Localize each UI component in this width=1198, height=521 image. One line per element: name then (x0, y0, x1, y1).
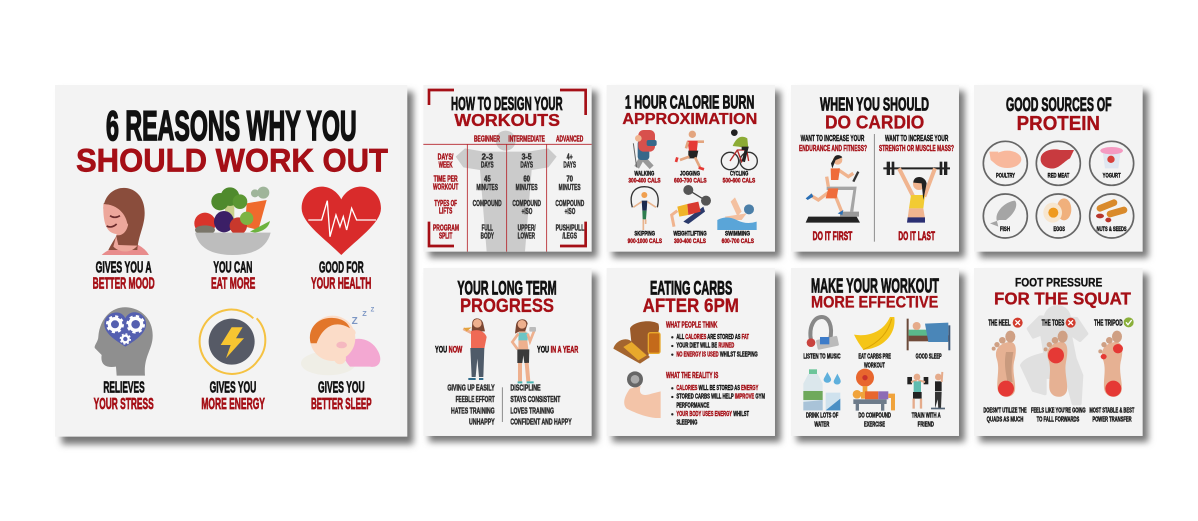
table cells: 70 (566, 175, 573, 184)
icon: head with gears (95, 307, 153, 376)
label: you now: YOU NOW (435, 344, 462, 354)
table row headings: SPLIT (439, 231, 452, 240)
label: walking (628, 171, 661, 184)
icon: swimmer (717, 197, 757, 230)
icon: fish (983, 194, 1027, 238)
title: WHEN YOU SHOULD (820, 94, 929, 115)
table cells: +ISO (565, 207, 575, 216)
table row headings: TYPES OF (434, 199, 457, 208)
icon: nuts and seeds (1090, 194, 1134, 238)
label: cycling: CYCLING (730, 171, 748, 178)
title (643, 278, 739, 317)
table column headings: INTERMEDIATE (508, 134, 545, 143)
title: DO CARDIO (825, 111, 924, 132)
label: the tripod: THE TRIPOD (1094, 318, 1123, 327)
label: train with a friend (912, 413, 941, 428)
icon: yogurt (1090, 141, 1134, 185)
label: weightlifting: WEIGHTLIFTING (673, 231, 707, 238)
list: now traits: FEEBLE EFFORT (456, 394, 495, 404)
icon: compound bench press (853, 369, 895, 411)
title: GOOD SOURCES OF (1006, 95, 1112, 116)
muscle figure watermark (456, 131, 557, 252)
title: 6 REASONS WHY YOU (106, 102, 357, 149)
icon: eggs (1036, 194, 1080, 238)
icon: training friends (907, 372, 945, 409)
table cells: MINUTES (516, 183, 538, 192)
label: relieves stress (94, 380, 154, 413)
caption: heel: QUADS AS MUCH (987, 416, 1023, 423)
label: jogging: 600-700 CALS (674, 177, 707, 184)
panel: 1 hour calorie burn (607, 85, 781, 258)
label: more energy: MORE ENERGY (201, 396, 265, 413)
table row headings (433, 152, 459, 240)
caption: heel: DOESN'T UTILIZE THE (983, 408, 1027, 415)
label: weightlifting: 300-400 CALS (674, 238, 706, 245)
panel: how to design your workouts (423, 85, 597, 258)
icon: poultry: POULTRY (996, 172, 1015, 179)
icon: jogger (676, 131, 704, 169)
icon: cyclist (721, 129, 757, 170)
table row headings: WORKOUT (433, 182, 458, 191)
label: do compound exercise: DO COMPOUND (858, 413, 891, 420)
question: strength (879, 133, 954, 153)
list: future traits: DISCIPLINE (510, 383, 541, 393)
label: cycling (723, 171, 756, 184)
question: endurance: ENDURANCE AND FITNESS? (799, 143, 867, 153)
corner brackets (429, 90, 586, 246)
list: what people think: WHAT PEOPLE THINK (666, 321, 717, 330)
label: more energy: GIVES YOU (210, 380, 256, 397)
table cells: 3-5 (522, 152, 532, 161)
label: do compound exercise: EXERCISE (864, 421, 885, 428)
label: cycling: 500-600 CALS (723, 177, 756, 184)
label: better mood: BETTER MOOD (93, 275, 155, 292)
table column headings: BEGINNER (474, 134, 500, 143)
list: future traits: STAYS CONSISTENT (510, 394, 561, 404)
table cells: FULL (482, 224, 493, 233)
figure: you now (463, 318, 487, 380)
table cells: MINUTES (559, 183, 581, 192)
title: HOW TO DESIGN YOUR (451, 93, 563, 114)
label: swimming: 600-700 CALS (722, 238, 754, 245)
caption: toes (1031, 408, 1086, 423)
label: weightlifting (673, 231, 707, 245)
table cells: LOWER (518, 231, 535, 240)
panel: good sources of protein (974, 85, 1148, 258)
title: MAKE YOUR WORKOUT (811, 276, 939, 298)
icon: sleeping baby: Z (352, 316, 358, 327)
list: what the reality is: PERFORMANCE (676, 402, 710, 409)
label: more energy (201, 380, 265, 413)
title: SHOULD WORK OUT (76, 143, 388, 179)
foot: tripod pressure (1098, 331, 1123, 397)
list: what the reality is: YOUR BODY USES ENERGY WHILST (676, 411, 749, 418)
label: swimming: SWIMMING (725, 231, 750, 238)
caption: tripod (1089, 408, 1135, 423)
label: walking: WALKING (634, 171, 654, 178)
icon: energy bolt (200, 310, 265, 374)
title (457, 278, 557, 317)
label: eat more: EAT MORE (211, 275, 255, 292)
icon: sleeping baby (301, 308, 380, 375)
title (1006, 95, 1112, 135)
table row headings: DAYS/ (438, 152, 454, 161)
table cells: DAYS (481, 160, 494, 169)
panel: when you should do cardio (791, 85, 965, 258)
icon: eggs: EGGS (1053, 226, 1065, 233)
title: WORKOUTS (454, 110, 560, 130)
label: skipping: SKIPPING (634, 231, 655, 238)
icon: headphones (807, 317, 839, 350)
table cells: COMPOUND (512, 199, 541, 208)
icon: walking hiker (633, 130, 657, 167)
list: future traits: CONFIDENT AND HAPPY (510, 417, 572, 427)
table cells: 60 (523, 175, 530, 184)
caption: toes: FEELS LIKE YOU'RE GOING (1031, 408, 1086, 415)
label: the heel: THE HEEL (988, 318, 1011, 327)
title: FOR THE SQUAT (994, 288, 1131, 308)
label: eat carbs pre workout (858, 354, 891, 369)
table row headings: LIFTS (439, 206, 453, 215)
list: future traits: LOVES TRAINING (510, 405, 554, 415)
label: better mood (93, 260, 155, 292)
foot: toes pressure (1044, 331, 1068, 397)
icon: treadmill runner (806, 155, 860, 223)
table cells: COMPOUND (555, 199, 584, 208)
label: drink lots of water: WATER (814, 421, 829, 428)
icon: red meat (1036, 141, 1080, 185)
label: do it first: DO IT FIRST (813, 229, 853, 243)
label: eat more: YOU CAN (213, 260, 252, 277)
icon: weightlifter (883, 162, 950, 223)
title: EATING CARBS (650, 278, 732, 299)
label: eat carbs pre workout: EAT CARBS PRE (858, 354, 891, 361)
list: what the reality is: STORED CARBS WILL HELP IMPROVE GYM (676, 394, 765, 401)
list: now traits: HATES TRAINING (451, 405, 495, 415)
table cells: 2-3 (482, 152, 494, 161)
label: your health: YOUR HEALTH (311, 275, 371, 292)
figure: you in a year (512, 319, 536, 383)
label: do compound exercise (858, 413, 891, 428)
list: what people think (666, 321, 758, 358)
title: APPROXIMATION (622, 111, 757, 128)
label: drink lots of water: DRINK LOTS OF (806, 413, 839, 420)
label: your health: GOOD FOR (319, 260, 364, 277)
table cells: DAYS (563, 160, 576, 169)
table cells: 45 (484, 175, 491, 184)
label: better sleep: BETTER SLEEP (311, 396, 372, 413)
list: what the reality is: SLEEPING (676, 420, 697, 427)
panel: make your workout more effective (791, 268, 965, 442)
table cells: UPPER/ (518, 224, 536, 233)
question: endurance (799, 133, 867, 153)
table grid (423, 144, 592, 252)
label: jogging: JOGGING (680, 171, 700, 178)
table row headings: TIME PER (434, 175, 458, 184)
panel: eating carbs after 6pm (607, 268, 781, 442)
table row headings: PROGRAM (433, 224, 459, 233)
icon: vegetable bowl (194, 187, 271, 255)
title: 1 HOUR CALORIE BURN (625, 91, 754, 112)
label: the toes: THE TOES (1042, 318, 1065, 327)
icon: bed (907, 319, 950, 350)
title (76, 102, 388, 179)
list: what people think: NO ENERGY IS USED WHILST SLEEPING (676, 351, 758, 358)
label: better sleep: GIVES YOU (318, 380, 365, 397)
icon: sleeping baby: Z (362, 309, 367, 318)
title (451, 93, 563, 130)
table cells: +ISO (522, 207, 532, 216)
table column headings (474, 134, 583, 143)
list: what people think: ALL CALORIES ARE STORED AS FAT (676, 334, 749, 341)
icon: sleeping baby: Z (371, 308, 375, 314)
title (820, 94, 929, 132)
label: better mood: GIVES YOU A (96, 260, 152, 277)
panel: foot pressure for the squat (974, 268, 1148, 442)
title: AFTER 6PM (643, 296, 739, 317)
question: endurance: WANT TO INCREASE YOUR (801, 133, 864, 143)
label: do it last: DO IT LAST (898, 229, 935, 243)
table cells: 4+ (567, 152, 573, 161)
caption: toes: TO FALL FORWARDS (1037, 416, 1080, 423)
list: now traits: UNHAPPY (469, 417, 495, 427)
title: YOUR LONG TERM (457, 278, 557, 299)
label: train with a friend: TRAIN WITH A (912, 413, 941, 420)
icon: nuts and seeds: NUTS & SEEDS (1097, 226, 1127, 233)
icon: banana (854, 317, 895, 350)
title: PROGRESS (460, 296, 554, 317)
icon: fish: FISH (1000, 226, 1010, 233)
label: skipping (628, 231, 662, 245)
icon: arm with dumbbell (624, 371, 661, 418)
question: strength: WANT TO INCREASE YOUR (885, 133, 948, 143)
table cells (473, 152, 584, 240)
table cells: /LEGS (562, 231, 577, 240)
caption: tripod: POWER TRANSFER (1092, 416, 1132, 423)
label: eat more (211, 260, 255, 292)
table cells: BODY (481, 231, 494, 240)
list: now traits (447, 383, 495, 427)
title: MORE EFFECTIVE (811, 293, 938, 312)
icon: poultry (983, 141, 1027, 185)
label: walking: 300-400 CALS (628, 177, 661, 184)
icon: skipping rope (631, 187, 658, 230)
panel: 6 reasons why you should work out (55, 85, 413, 444)
label: train with a friend: FRIEND (918, 421, 934, 428)
label: skipping: 900-1000 CALS (628, 238, 662, 245)
label: your health (311, 260, 371, 292)
list: what the reality is: CALORIES WILL BE STORED AS ENERGY (676, 385, 759, 392)
label: good sleep: GOOD SLEEP (916, 354, 942, 361)
panel: your long term progress (423, 268, 597, 442)
list: now traits: GIVING UP EASILY (447, 383, 495, 393)
table cells: COMPOUND (473, 199, 502, 208)
table cells: MINUTES (476, 183, 498, 192)
label: jogging (674, 171, 707, 184)
squat figure watermark (1022, 307, 1087, 404)
question: strength: STRENGTH OR MUSCLE MASS? (879, 143, 954, 153)
list: what the reality is (666, 371, 765, 427)
icon: smiling woman (102, 188, 149, 255)
label: drink lots of water (806, 413, 839, 428)
table column headings: ADVANCED (556, 134, 583, 143)
label: better sleep (311, 380, 372, 413)
table row headings: WEEK (439, 160, 453, 169)
icon: red meat: RED MEAT (1048, 172, 1069, 179)
label: swimming (722, 231, 754, 245)
label: listen to music: LISTEN TO MUSIC (803, 354, 841, 361)
list: what people think: YOUR DIET WILL BE RUINED (676, 343, 734, 350)
label: you in a year: YOU IN A YEAR (537, 344, 578, 354)
label: relieves stress: RELIEVES (103, 380, 145, 397)
icon: water bottle and glass (803, 369, 841, 410)
title (811, 276, 939, 312)
table cells: DAYS (520, 160, 533, 169)
icon: toast and juice (613, 321, 660, 364)
title: PROTEIN (1017, 112, 1100, 135)
list: future traits (510, 383, 572, 427)
title: FOOT PRESSURE (1015, 275, 1102, 289)
icon: bench press (672, 185, 711, 227)
foot: heel pressure (992, 331, 1016, 397)
list: what the reality is: WHAT THE REALITY IS (666, 371, 719, 380)
label: eat carbs pre workout: WORKOUT (864, 362, 885, 369)
caption: tripod: MOST STABLE & BEST (1089, 408, 1135, 415)
table cells: PUSH/PULL (556, 224, 584, 233)
title (994, 275, 1131, 308)
icon: heart with pulse (302, 187, 381, 255)
caption: heel (983, 408, 1027, 423)
title (622, 91, 757, 128)
label: relieves stress: YOUR STRESS (94, 396, 154, 413)
icon: yogurt: YOGURT (1103, 172, 1121, 179)
